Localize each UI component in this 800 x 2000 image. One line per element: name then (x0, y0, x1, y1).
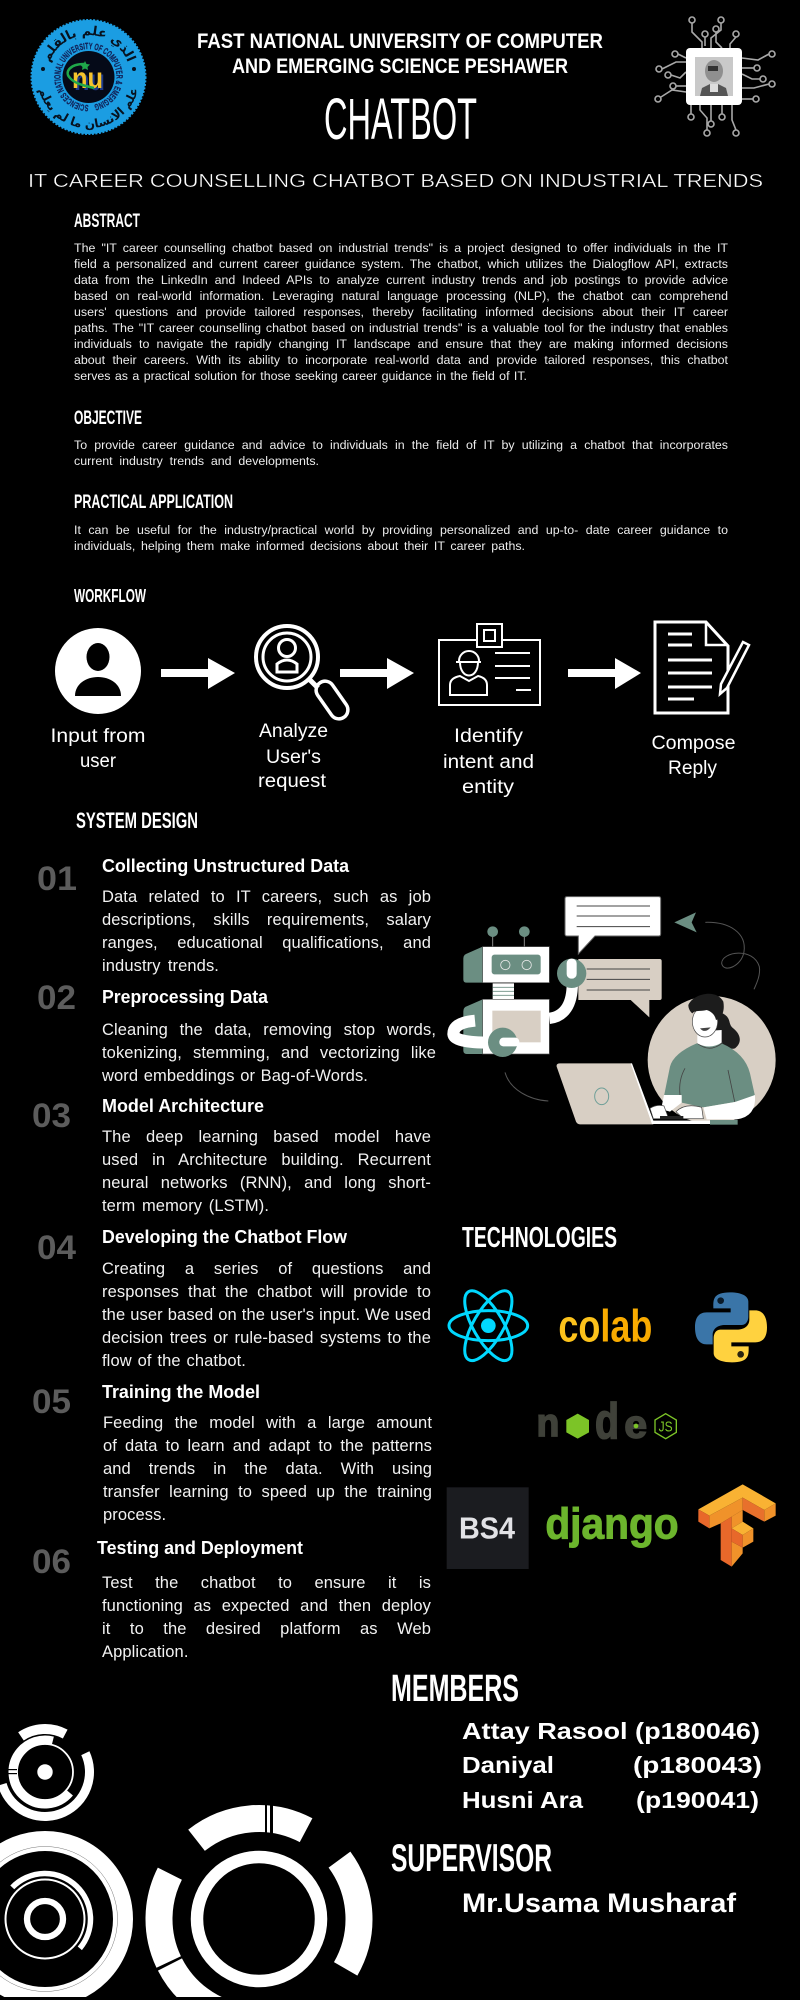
step number 02: 02 (37, 979, 76, 1017)
speech bubble: white (565, 897, 661, 954)
heading: members: MEMBERS (391, 1668, 519, 1710)
label: analyze user's request: Analyze (259, 720, 328, 742)
text: objective body (74, 438, 728, 468)
arrow: workflow step 3 to 4 (568, 658, 641, 689)
text: step 02 body: tokenizing, stemming, and vectorizing like (102, 1044, 436, 1062)
member: Husni Ara (462, 1787, 759, 1813)
text: step 03 body: used in Architecture building. Recurrent (102, 1151, 431, 1169)
step title 04: Developing the Chatbot Flow (102, 1226, 348, 1247)
member: Husni Ara: Husni Ara (462, 1787, 583, 1813)
logo: node js: e (624, 1403, 647, 1447)
text: step 05 body: of data to learn and adapt to the patterns (103, 1437, 432, 1455)
step number 06: 06 (32, 1543, 71, 1581)
icon: university logo: الذي علم بالقلم (47, 26, 136, 63)
curved line (505, 1072, 548, 1101)
member list (462, 1718, 762, 1813)
text: step 04 body: flow of the chatbot. (102, 1352, 246, 1370)
title: university name: FAST NATIONAL UNIVERSITY OF COMPUTER (197, 29, 603, 53)
arrow: workflow step 1 to 2 (161, 658, 235, 689)
title: university name (197, 29, 603, 78)
step number 05: 05 (32, 1383, 71, 1421)
label: identify intent and entity (443, 725, 534, 798)
text: abstract body: users' questions and provide tailored responses, thereby facilitating informed decisions about their IT career (74, 305, 728, 319)
label: compose reply: Reply (668, 757, 717, 779)
text: abstract body: field a personalized and current career guidance system. The chatbot, which utilizes the Dialogflow API, extracts (74, 257, 728, 271)
text: abstract body: individuals to navigate the rapidly changing IT landscape and ensure that they are making informed decisions (74, 337, 728, 351)
logo: django: django (545, 1499, 679, 1548)
logo: tensorflow (698, 1484, 776, 1567)
text: step 02 body: word embeddings or Bag-of-Words. (102, 1067, 368, 1085)
heading: abstract: ABSTRACT (74, 211, 140, 232)
text: step 02 body: Cleaning the data, removing stop words, (102, 1021, 436, 1039)
icon: university logo: nu (74, 64, 105, 97)
icon: ID card (439, 624, 540, 705)
text: step 06 body: Test the chatbot to ensure it is (102, 1574, 431, 1592)
title: university name: AND EMERGING SCIENCE PESHAWER (232, 54, 568, 78)
text: step 04 body: the user based on the user's input. We used (102, 1306, 431, 1324)
member: Daniyal: Daniyal (462, 1752, 554, 1778)
illustration: robot and woman chatting (453, 897, 776, 1125)
text: step 01 body: ranges, educational qualifications, and (102, 934, 431, 952)
label: compose reply (652, 732, 736, 779)
text: step 03 body (102, 1128, 431, 1215)
text: step 01 body (102, 888, 431, 975)
step title 03: Model Architecture (102, 1095, 264, 1116)
heading: system design: SYSTEM DESIGN (76, 808, 198, 833)
step title 05: Training the Model (102, 1381, 260, 1402)
text: step 01 body: industry trends. (102, 957, 219, 975)
text: step 06 body: Application. (102, 1643, 189, 1661)
text: step 04 body: Creating a series of questions and (102, 1260, 431, 1278)
text: step 01 body: descriptions, skills requirements, salary (102, 911, 431, 929)
icon: robot circuit chip (655, 17, 775, 136)
member: Attay Rasool: Attay Rasool (p180046) (462, 1718, 760, 1744)
text: step 03 body: term memory (LSTM). (102, 1197, 269, 1215)
heading: supervisor: SUPERVISOR (391, 1837, 552, 1880)
text: step 03 body: The deep learning based model have (102, 1128, 431, 1146)
label: analyze user's request: User's (266, 746, 321, 768)
text: step 02 body (102, 1021, 436, 1085)
subtitle: IT CAREER COUNSELLING CHATBOT BASED ON INDUSTRIAL TRENDS (28, 171, 763, 191)
member: Daniyal (462, 1752, 762, 1778)
text: practical application body: It can be useful for the industry/practical world by providing personalized and up-to- date career guidance to (74, 523, 728, 537)
decoration: right target rings (118, 1778, 400, 2000)
speech bubble: beige (578, 959, 662, 1017)
text: step 05 body: transfer learning to speed up the training (103, 1483, 432, 1501)
label: identify intent and entity: Identify (454, 725, 523, 747)
icon: university logo: nu (72, 62, 103, 95)
heading: technologies: TECHNOLOGIES (462, 1222, 617, 1254)
text: step 03 body: neural networks (RNN), and long short- (102, 1174, 431, 1192)
icon: magnifier with user (256, 626, 351, 722)
text: step 06 body: it to the desired platform as Web (102, 1620, 431, 1638)
icon: user in circle (55, 628, 141, 714)
step number 04: 04 (37, 1229, 76, 1267)
technology logos (447, 1284, 776, 1569)
step title 02: Preprocessing Data (102, 986, 269, 1007)
member: Husni Ara: (p190041) (636, 1787, 759, 1813)
logo: node js (537, 1393, 676, 1449)
supervisor name: Mr.Usama Musharaf (462, 1888, 737, 1918)
text: abstract body: serves as a practical solution for those seeking career guidance in the field of IT. (74, 369, 527, 383)
icon: university logo: علم الانسان ما لم يعلم (36, 90, 136, 130)
icon: paper plane arrow (674, 912, 697, 932)
text: objective body: To provide career guidance and advice to individuals in the field of IT by utilizing a chatbot that incorporates (74, 438, 728, 452)
label: input from user: Input from (50, 725, 146, 747)
logo: node js: JS (659, 1419, 673, 1435)
logo: colab: colab (558, 1301, 652, 1352)
logo: node js: n (537, 1401, 559, 1445)
icon: university logo: SCIENCES NATIONAL UNIVERSITY OF COMPUTER & EMERGING (54, 42, 123, 112)
text: abstract body: data from the LinkedIn and Indeed APIs to analyze current industry trends and job postings to provide advice (74, 273, 728, 287)
logo: node js: d (595, 1393, 619, 1449)
text: step 05 body: Feeding the model with a large amount (103, 1414, 432, 1432)
text: step 06 body (102, 1574, 431, 1661)
arrow: workflow step 2 to 3 (340, 658, 414, 689)
label: input from user (50, 725, 146, 772)
label: identify intent and entity: entity (462, 776, 514, 798)
text: abstract body (74, 241, 728, 383)
decoration: left target rings (0, 1841, 123, 1997)
step title 01: Collecting Unstructured Data (102, 855, 350, 876)
step number 01: 01 (37, 860, 77, 898)
label: compose reply: Compose (652, 732, 736, 754)
member: Daniyal: (p180043) (633, 1752, 762, 1778)
label: analyze user's request (258, 720, 328, 792)
logo: bootstrap 4: BS4 (459, 1511, 515, 1545)
heading: workflow: WORKFLOW (74, 586, 146, 606)
text: objective body: current industry trends and developments. (74, 454, 319, 468)
text: step 05 body: and trends in the data. With using (103, 1460, 432, 1478)
logo: bootstrap 4 (447, 1487, 529, 1569)
decoration: small target rings (0, 1712, 105, 1832)
step number 03: 03 (32, 1097, 71, 1135)
robot (453, 926, 586, 1057)
text: step 04 body (102, 1260, 431, 1370)
icon: university logo (30, 19, 146, 135)
heading: objective: OBJECTIVE (74, 408, 142, 429)
text: abstract body: paths. The "IT career counselling chatbot based on industrial trends" is a valuable tool for the industry that enables (74, 321, 728, 335)
text: step 04 body: decision trees or rule-based systems to the (102, 1329, 431, 1347)
text: step 01 body: Data related to IT careers, such as job (102, 888, 431, 906)
curl line (705, 922, 760, 989)
heading: practical application: PRACTICAL APPLICATION (74, 492, 233, 513)
text: abstract body: The "IT career counselling chatbot based on industrial trends" is a project designed to offer individuals in the IT (74, 241, 728, 255)
text: step 06 body: functioning as expected and then deploy (102, 1597, 431, 1615)
logo: python (695, 1292, 767, 1362)
step title 06: Testing and Deployment (97, 1537, 303, 1558)
text: step 05 body: process. (103, 1506, 166, 1524)
text: practical application body: individuals, helping them make informed decisions about their IT career paths. (74, 539, 525, 553)
label: identify intent and entity: intent and (443, 751, 534, 773)
label: input from user: user (80, 750, 116, 772)
woman at laptop (557, 994, 776, 1125)
text: abstract body: based on real-world information. Leveraging natural language processing (NLP), the chatbot can comprehend (74, 289, 728, 303)
title: chatbot: CHATBOT (324, 87, 477, 152)
label: analyze user's request: request (258, 770, 327, 792)
logo: react (449, 1284, 528, 1367)
icon: document with pencil (655, 622, 749, 713)
text: practical application body (74, 523, 728, 553)
text: abstract body: about their careers. With its ability to incorporate real-world data and provide tailored responses, this chatbot (74, 353, 728, 367)
text: step 05 body (103, 1414, 432, 1524)
text: step 04 body: responses that the chatbot will provide to (102, 1283, 431, 1301)
